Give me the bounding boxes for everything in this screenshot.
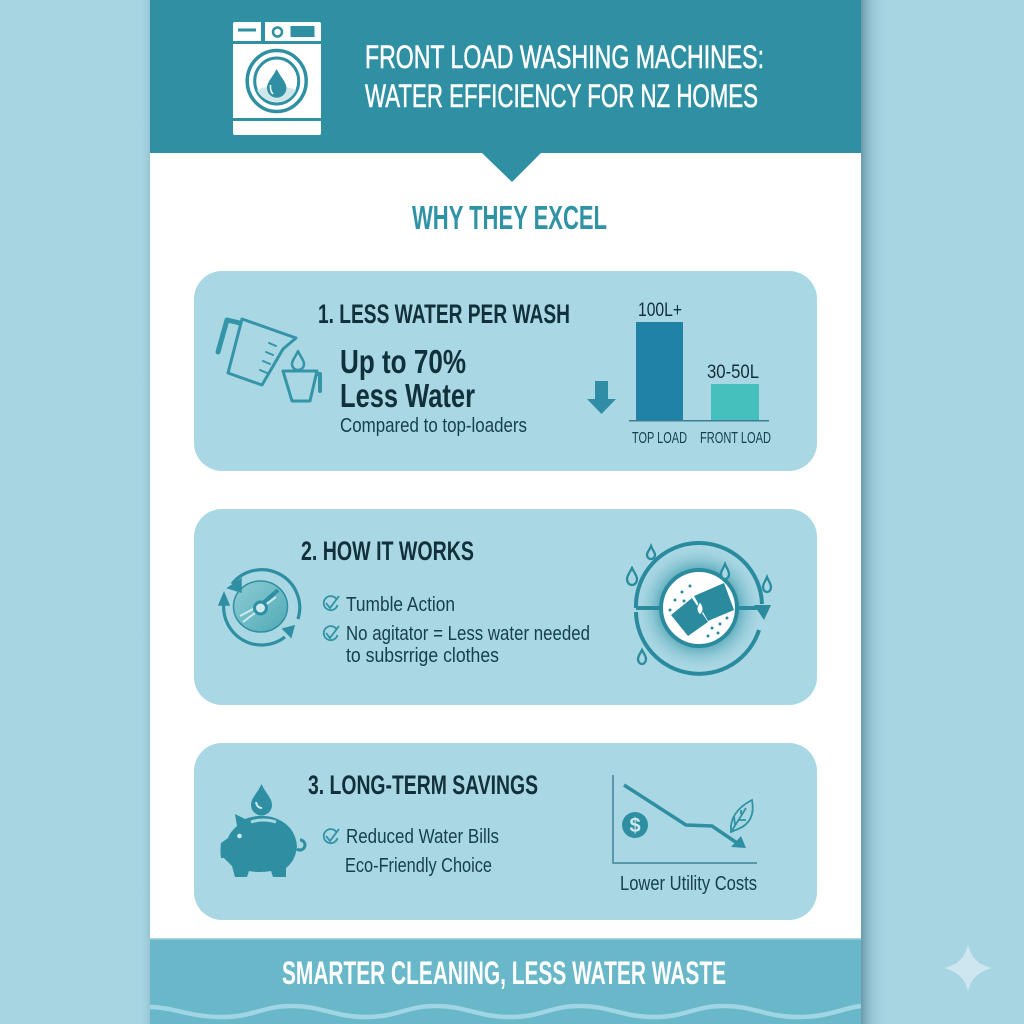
benefits list: Eco-Friendly Choice — [345, 855, 492, 877]
stat: up to 70% less water: Up to 70% — [340, 343, 466, 380]
bar chart: 30-50L — [707, 362, 759, 383]
benefits list: Reduced Water Bills — [346, 826, 499, 848]
check icon — [324, 829, 339, 843]
header banner — [150, 0, 861, 182]
icon: leaf — [731, 800, 753, 832]
heading: why they excel: WHY THEY EXCEL — [412, 199, 607, 236]
check icon — [324, 596, 339, 610]
check icon — [324, 626, 339, 640]
heading: 2. HOW IT WORKS — [301, 536, 474, 566]
title: WATER EFFICIENCY FOR NZ HOMES — [365, 78, 758, 114]
main sheet — [150, 0, 861, 1024]
icon: dial with rotation arrows — [219, 570, 300, 645]
panel: long-term savings — [194, 743, 817, 920]
caption: Compared to top-loaders — [340, 415, 527, 437]
tagline: SMARTER CLEANING, LESS WATER WASTE — [282, 955, 726, 991]
bar chart — [629, 300, 771, 447]
panel: how it works — [194, 509, 817, 705]
wave — [150, 1006, 861, 1017]
heading: 1. LESS WATER PER WASH — [318, 299, 570, 329]
checklist: No agitator = Less water needed — [346, 623, 590, 645]
chart caption: Lower Utility Costs — [620, 873, 757, 895]
bar chart: 100L+ — [638, 300, 682, 321]
line chart: falling costs — [613, 775, 757, 863]
water drops — [627, 546, 771, 664]
sparkle — [944, 943, 992, 993]
icon: measuring jugs — [218, 319, 320, 401]
panel: less water per wash — [194, 271, 817, 471]
footer banner — [150, 938, 861, 1024]
icon: down arrow — [587, 381, 616, 414]
heading: 3. LONG-TERM SAVINGS — [308, 770, 538, 800]
benefits list — [324, 826, 499, 877]
checklist: to subsrrige clothes — [346, 645, 499, 667]
checklist: Tumble Action — [346, 594, 455, 616]
line chart: falling costs: $ — [629, 815, 641, 837]
icon: tumble drum — [627, 543, 771, 674]
icon: dollar coin — [622, 812, 648, 838]
title: FRONT LOAD WASHING MACHINES: — [365, 39, 764, 75]
title — [365, 39, 764, 114]
bar chart: TOP LOAD — [632, 430, 687, 447]
stat: up to 70% less water: Less Water — [340, 377, 475, 414]
checklist — [324, 594, 590, 667]
stat: up to 70% less water — [340, 343, 475, 414]
icon: washing machine — [233, 22, 321, 135]
bar chart: FRONT LOAD — [700, 430, 771, 447]
icon: piggy bank with drop — [220, 784, 305, 877]
